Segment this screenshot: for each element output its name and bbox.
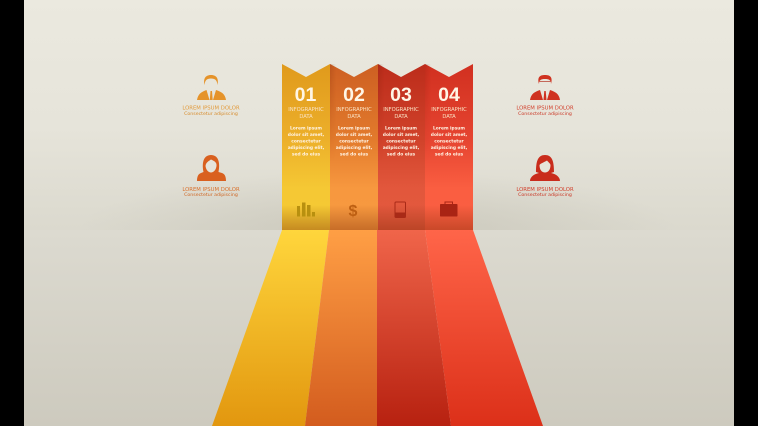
body text 3: Lorem ipsum — [385, 126, 417, 132]
label: LOREM IPSUM DOLOR — [516, 106, 574, 112]
number 04: 04 — [438, 84, 460, 106]
heading 2: INFOGRAPHIC — [336, 107, 372, 113]
label: LOREM IPSUM DOLOR — [182, 106, 240, 112]
label — [516, 187, 574, 198]
background wall — [24, 0, 734, 230]
icon: briefcase — [440, 202, 458, 216]
person: woman red, bottom right — [516, 155, 574, 198]
column 1 — [282, 64, 330, 230]
body text 4: Lorem ipsum — [433, 126, 465, 132]
body text 3 — [383, 126, 420, 158]
body text 4: dolor sit amet, — [431, 132, 468, 138]
body text 2: adipiscing elit, — [336, 145, 373, 151]
icon: man with tie — [197, 75, 226, 100]
heading 4: INFOGRAPHIC — [431, 107, 467, 113]
column 2 — [330, 64, 378, 230]
label: Consectetur adipiscing — [518, 111, 572, 117]
label: LOREM IPSUM DOLOR — [182, 187, 240, 193]
body text 3: dolor sit amet, — [383, 132, 420, 138]
background floor — [24, 230, 734, 426]
heading 4: DATA — [442, 114, 456, 120]
number 01: 01 — [295, 84, 316, 106]
body text 1: sed do eius — [292, 152, 320, 158]
label — [182, 106, 240, 117]
body text 2 — [336, 126, 373, 158]
body text 4: adipiscing elit, — [431, 145, 468, 151]
heading 3: DATA — [394, 114, 408, 120]
body text 1: adipiscing elit, — [288, 145, 325, 151]
body text 4: consectetur — [434, 138, 465, 144]
label — [182, 187, 240, 198]
heading 1 — [288, 107, 324, 120]
column 4 — [425, 64, 473, 230]
body text 3: adipiscing elit, — [383, 145, 420, 151]
wall base shadow — [24, 160, 734, 230]
label: Consectetur adipiscing — [184, 192, 238, 198]
number 03: 03 — [390, 84, 412, 106]
body text 1: dolor sit amet, — [288, 132, 325, 138]
label: Consectetur adipiscing — [518, 192, 572, 198]
body text 1: consectetur — [291, 138, 322, 144]
heading 3 — [383, 107, 419, 120]
heading 1: INFOGRAPHIC — [288, 107, 324, 113]
body text 2: Lorem ipsum — [338, 126, 370, 132]
heading 4 — [431, 107, 467, 120]
person: woman orange, bottom left — [182, 155, 240, 198]
body text 4: sed do eius — [435, 152, 463, 158]
number 02: 02 — [343, 84, 365, 106]
person: man orange, top left — [182, 75, 240, 117]
heading 3: INFOGRAPHIC — [383, 107, 419, 113]
label — [516, 106, 574, 117]
body text 3: consectetur — [386, 138, 417, 144]
heading 2 — [336, 107, 372, 120]
column base shadow — [282, 205, 473, 230]
floor ribbons — [212, 230, 543, 426]
heading 2: DATA — [347, 114, 361, 120]
icon: woman — [197, 155, 226, 181]
body text 2: sed do eius — [340, 152, 368, 158]
label: LOREM IPSUM DOLOR — [516, 187, 574, 193]
icon: woman — [530, 155, 560, 181]
icon: dollar: $ — [349, 203, 358, 220]
icon: man with glasses — [530, 75, 560, 100]
person: man red, top right — [516, 75, 574, 117]
body text 2: consectetur — [339, 138, 370, 144]
body text 3: sed do eius — [387, 152, 415, 158]
icon: bar chart — [297, 202, 315, 216]
icon: phone — [395, 202, 406, 218]
body text 2: dolor sit amet, — [336, 132, 373, 138]
body text 1 — [288, 126, 325, 158]
body text 1: Lorem ipsum — [290, 126, 322, 132]
label: Consectetur adipiscing — [184, 111, 238, 117]
heading 1: DATA — [299, 114, 313, 120]
column 3 — [378, 64, 425, 230]
body text 4 — [431, 126, 468, 158]
